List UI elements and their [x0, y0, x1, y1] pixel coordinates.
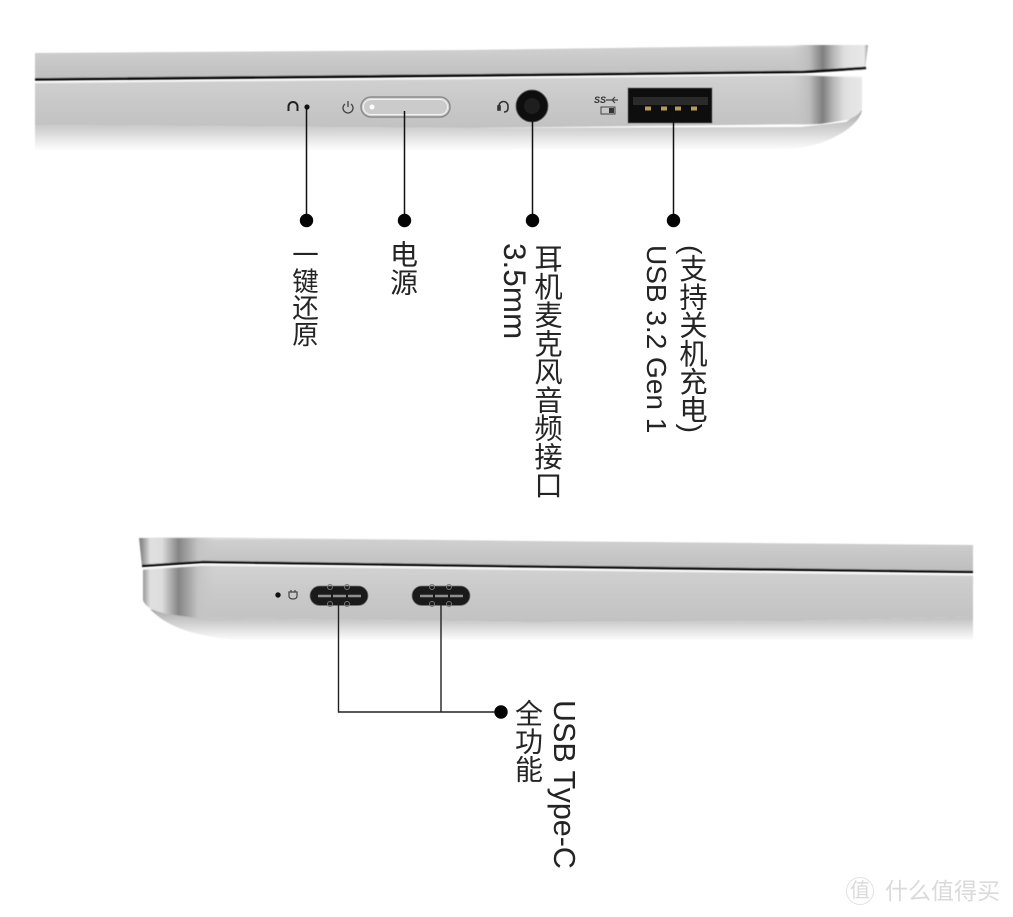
label: power: 电源 — [387, 240, 418, 296]
icon: SS USB and charging symbol — [594, 95, 618, 114]
watermark — [846, 877, 1000, 905]
icon: reset symbol and pinhole — [288, 102, 310, 111]
label: audio jack: 耳机麦克风音频接口 — [531, 244, 563, 499]
watermark: 值 — [850, 880, 870, 902]
label: one-key recovery: 一键还原 — [288, 241, 318, 347]
label: USB 3.2 Gen 1: USB 3.2 Gen 1 — [641, 245, 672, 433]
USB-C port 1 — [310, 584, 368, 606]
label: USB Type-C: USB Type-C — [547, 700, 581, 869]
leader: reset — [300, 108, 313, 227]
watermark: 什么值得买 — [885, 878, 1000, 904]
label: shutdown charging note: (支持关机充电) — [676, 245, 708, 433]
leader: USB-C bracket — [338, 605, 508, 719]
icon: SS USB and charging symbol: SS — [594, 95, 606, 105]
LED dot and charge icon — [275, 590, 297, 599]
leader: headphone jack — [526, 120, 539, 227]
laptop: bottom view (left side) — [139, 537, 973, 641]
leader: power — [398, 111, 411, 227]
icon: headphone symbol — [498, 102, 508, 112]
USB-A port — [628, 88, 712, 123]
power button — [361, 97, 450, 117]
label: 3.5mm: 3.5mm — [497, 243, 533, 339]
USB-C port 2 — [412, 584, 470, 606]
label: full function: 全功能 — [512, 699, 543, 783]
headphone jack — [516, 90, 548, 122]
leader: USB-A — [667, 112, 680, 227]
icon: power symbol — [343, 101, 353, 113]
laptop: top view (right side) — [35, 45, 868, 151]
